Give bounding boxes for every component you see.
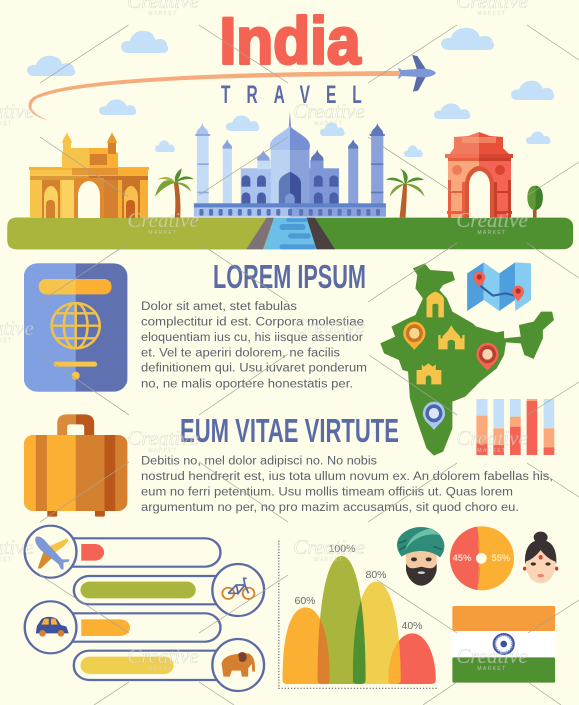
map icon: gate	[427, 292, 444, 317]
map pin: blue	[423, 402, 445, 430]
map pin: orange	[403, 322, 425, 350]
watermark text: Creative	[127, 644, 199, 668]
heading: Lorem Ipsum: LOREM IPSUM	[213, 258, 366, 295]
watermark text: Creative	[456, 208, 528, 232]
subtitle: TRAVEL	[221, 81, 362, 109]
row: elephant	[74, 639, 264, 691]
label: 45 percent: 45%	[452, 553, 472, 564]
heading: Eum Vitae Virtute: EUM VITAE VIRTUTE	[180, 412, 399, 449]
palm tree left	[155, 168, 194, 218]
watermark text: MARKET	[314, 557, 344, 563]
label: 100: 100%	[329, 543, 355, 555]
paragraph one: eloquentiam ius cu, his iisque assentior	[141, 332, 363, 344]
transport progress bars	[25, 526, 264, 691]
paragraph two: Debitis no, mel dolor adipisci no. No nobis	[141, 455, 377, 467]
map icon: gateway	[417, 363, 441, 384]
watermark text: MARKET	[148, 230, 178, 236]
landmark: Taj Mahal	[194, 112, 386, 217]
icon: man with turban	[397, 527, 444, 586]
title: India	[220, 4, 362, 78]
label: 40: 40%	[401, 620, 423, 632]
watermark text: MARKET	[477, 666, 507, 672]
label: 55 percent: 55%	[491, 553, 511, 564]
map pin: red	[476, 343, 499, 371]
peak: 60 percent	[283, 607, 330, 684]
paragraph one: complectitur id est. Corpora molestiae	[141, 317, 364, 329]
watermark text: MARKET	[477, 11, 507, 17]
small tree	[527, 186, 543, 218]
peak: 40 percent	[389, 633, 436, 684]
clouds	[27, 28, 554, 157]
landscape ground	[7, 218, 573, 249]
watermark text: Creative	[127, 208, 199, 232]
watermark text: MARKET	[148, 11, 178, 17]
row: plane	[25, 526, 220, 578]
label: 60: 60%	[294, 595, 316, 607]
peak: 100 percent	[318, 556, 366, 684]
icon: passport	[24, 263, 127, 392]
watermark text: Creative	[456, 426, 528, 450]
icon: airplane	[398, 55, 436, 92]
watermark text: Creative	[293, 314, 365, 338]
watermark text: MARKET	[148, 448, 178, 454]
pie chart	[450, 526, 514, 590]
paragraph one: Dolor sit amet, stet fabulas	[141, 301, 297, 313]
map icon: taj	[438, 325, 465, 349]
watermark text: MARKET	[148, 666, 178, 672]
paragraph two: eum no ferri petentium. Usu mollis timeam officiis ut. Quas lorem	[141, 487, 513, 499]
paragraph one: et. Vel te aperiri dolorem, ne facilis	[141, 348, 340, 360]
paragraph two	[141, 455, 553, 514]
icon: folded map	[467, 262, 531, 311]
icon: woman	[523, 532, 558, 583]
paragraph two: nostrud hendrerit est, ius tota ullum novum ex. An dolorem fabellas his,	[141, 471, 553, 483]
watermark text: Creative	[293, 535, 365, 559]
paragraph one: no, ne malis oportere honestatis per.	[141, 378, 353, 390]
label: 80: 80%	[365, 569, 387, 581]
watermark text: Creative	[293, 99, 365, 123]
watermark text: MARKET	[314, 121, 344, 127]
stacked bar chart	[476, 399, 554, 455]
area peak chart	[279, 541, 438, 688]
landmark: India Gate	[445, 132, 513, 218]
peak: 80 percent	[353, 582, 401, 684]
watermark text: MARKET	[477, 448, 507, 454]
watermark text: Creative	[127, 426, 199, 450]
map of India	[380, 263, 554, 456]
palm tree right	[386, 168, 425, 218]
row: bicycle	[74, 564, 264, 616]
landmark: Gateway of India	[29, 132, 149, 218]
row: car	[25, 601, 220, 653]
watermark text: Creative	[456, 644, 528, 668]
watermark text: MARKET	[477, 230, 507, 236]
paragraph one: definitionem qui. Usu iuvaret ponderum	[141, 363, 367, 375]
icon: suitcase	[24, 414, 127, 517]
icon: Indian flag	[452, 606, 555, 683]
watermark text: MARKET	[314, 336, 344, 342]
paragraph two: argumentum no per, no pro mazim accusamus, sit quod choro eu.	[141, 502, 519, 514]
paragraph one	[141, 301, 367, 390]
flight trail	[29, 71, 399, 120]
